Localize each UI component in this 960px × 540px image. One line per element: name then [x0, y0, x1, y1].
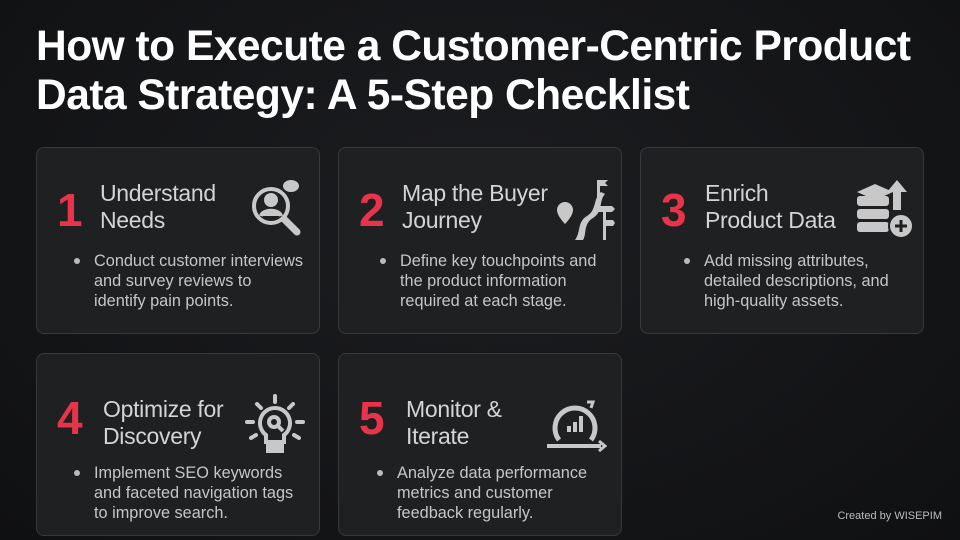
- text 1: and survey reviews to: [94, 272, 251, 290]
- panel: step 5: [338, 353, 622, 536]
- heading 4: Optimize for: [103, 396, 223, 422]
- heading 1: Understand: [100, 180, 216, 206]
- text 3: [704, 251, 889, 311]
- title: How to Execute a Customer-Centric Product: [36, 23, 911, 70]
- number 3: 3: [661, 184, 687, 236]
- panel: step 3: [640, 147, 924, 334]
- text 3: high-quality assets.: [704, 292, 843, 310]
- heading 3: Enrich: [705, 180, 768, 206]
- number 2: 2: [359, 184, 385, 236]
- text 3: detailed descriptions, and: [704, 272, 889, 290]
- text 2: required at each stage.: [400, 292, 567, 310]
- panel: step 2: [338, 147, 622, 334]
- text 5: Analyze data performance: [397, 464, 587, 482]
- text 5: [397, 463, 587, 523]
- text 1: identify pain points.: [94, 292, 233, 310]
- heading 3: Product Data: [705, 207, 836, 233]
- text 4: and faceted navigation tags: [94, 484, 293, 502]
- text 4: [94, 463, 293, 523]
- heading 2: [402, 180, 548, 233]
- text 5: feedback regularly.: [397, 504, 533, 522]
- heading 4: [103, 396, 224, 449]
- text 1: [94, 251, 303, 311]
- text 2: the product information: [400, 272, 567, 290]
- text 2: [400, 251, 596, 311]
- heading 4: Discovery: [103, 423, 201, 449]
- text 4: to improve search.: [94, 504, 228, 522]
- credit: Created by WISEPIM: [837, 510, 942, 522]
- panel: step 4: [36, 353, 320, 536]
- panel: step 1: [36, 147, 320, 334]
- text 3: Add missing attributes,: [704, 252, 869, 270]
- number 5: 5: [359, 392, 385, 444]
- heading 5: Monitor &: [406, 396, 502, 422]
- heading 2: Journey: [402, 207, 482, 233]
- title: [36, 23, 911, 119]
- text 1: Conduct customer interviews: [94, 252, 303, 270]
- icon: search person: [252, 180, 300, 236]
- number 1: 1: [57, 184, 83, 236]
- number 4: 4: [57, 392, 83, 444]
- heading 5: Iterate: [406, 423, 469, 449]
- title: Data Strategy: A 5-Step Checklist: [36, 72, 689, 119]
- heading 1: Needs: [100, 207, 165, 233]
- text 4: Implement SEO keywords: [94, 464, 282, 482]
- heading 5: [406, 396, 502, 449]
- icon: lightbulb: [245, 394, 305, 453]
- text 2: Define key touchpoints and: [400, 252, 596, 270]
- heading 3: [705, 180, 836, 233]
- icon: database plus: [857, 180, 912, 237]
- heading 1: [100, 180, 216, 233]
- icon: cycle chart: [547, 400, 607, 452]
- icon: road: [557, 180, 615, 240]
- text 5: metrics and customer: [397, 484, 553, 502]
- heading 2: Map the Buyer: [402, 180, 548, 206]
